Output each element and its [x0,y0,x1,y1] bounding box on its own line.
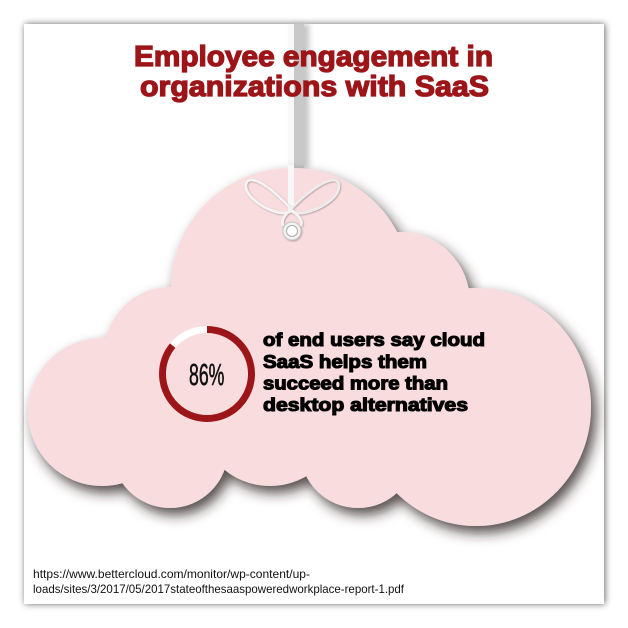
title: organizations with SaaS [140,71,489,103]
statistic description [263,330,485,415]
statistic description: desktop alternatives [263,395,468,415]
donut chart: 86% [162,330,252,418]
statistic description: succeed more than [263,374,448,394]
ribbon over cloud [288,165,294,211]
source link [33,567,405,596]
title: Employee engagement in [134,41,493,73]
statistic description: of end users say cloud [263,330,485,350]
cloud shape [28,168,591,526]
donut value: 86% [189,358,224,392]
statistic description: SaaS helps them [263,352,427,372]
hanging ribbon [288,24,309,210]
source link: loads/sites/3/2017/05/2017stateofthesaaspoweredworkplace-report-1.pdf [33,582,405,596]
bow and eyelet [246,180,339,240]
source link: https://www.bettercloud.com/monitor/wp-content/up- [33,567,310,581]
title [134,41,493,103]
